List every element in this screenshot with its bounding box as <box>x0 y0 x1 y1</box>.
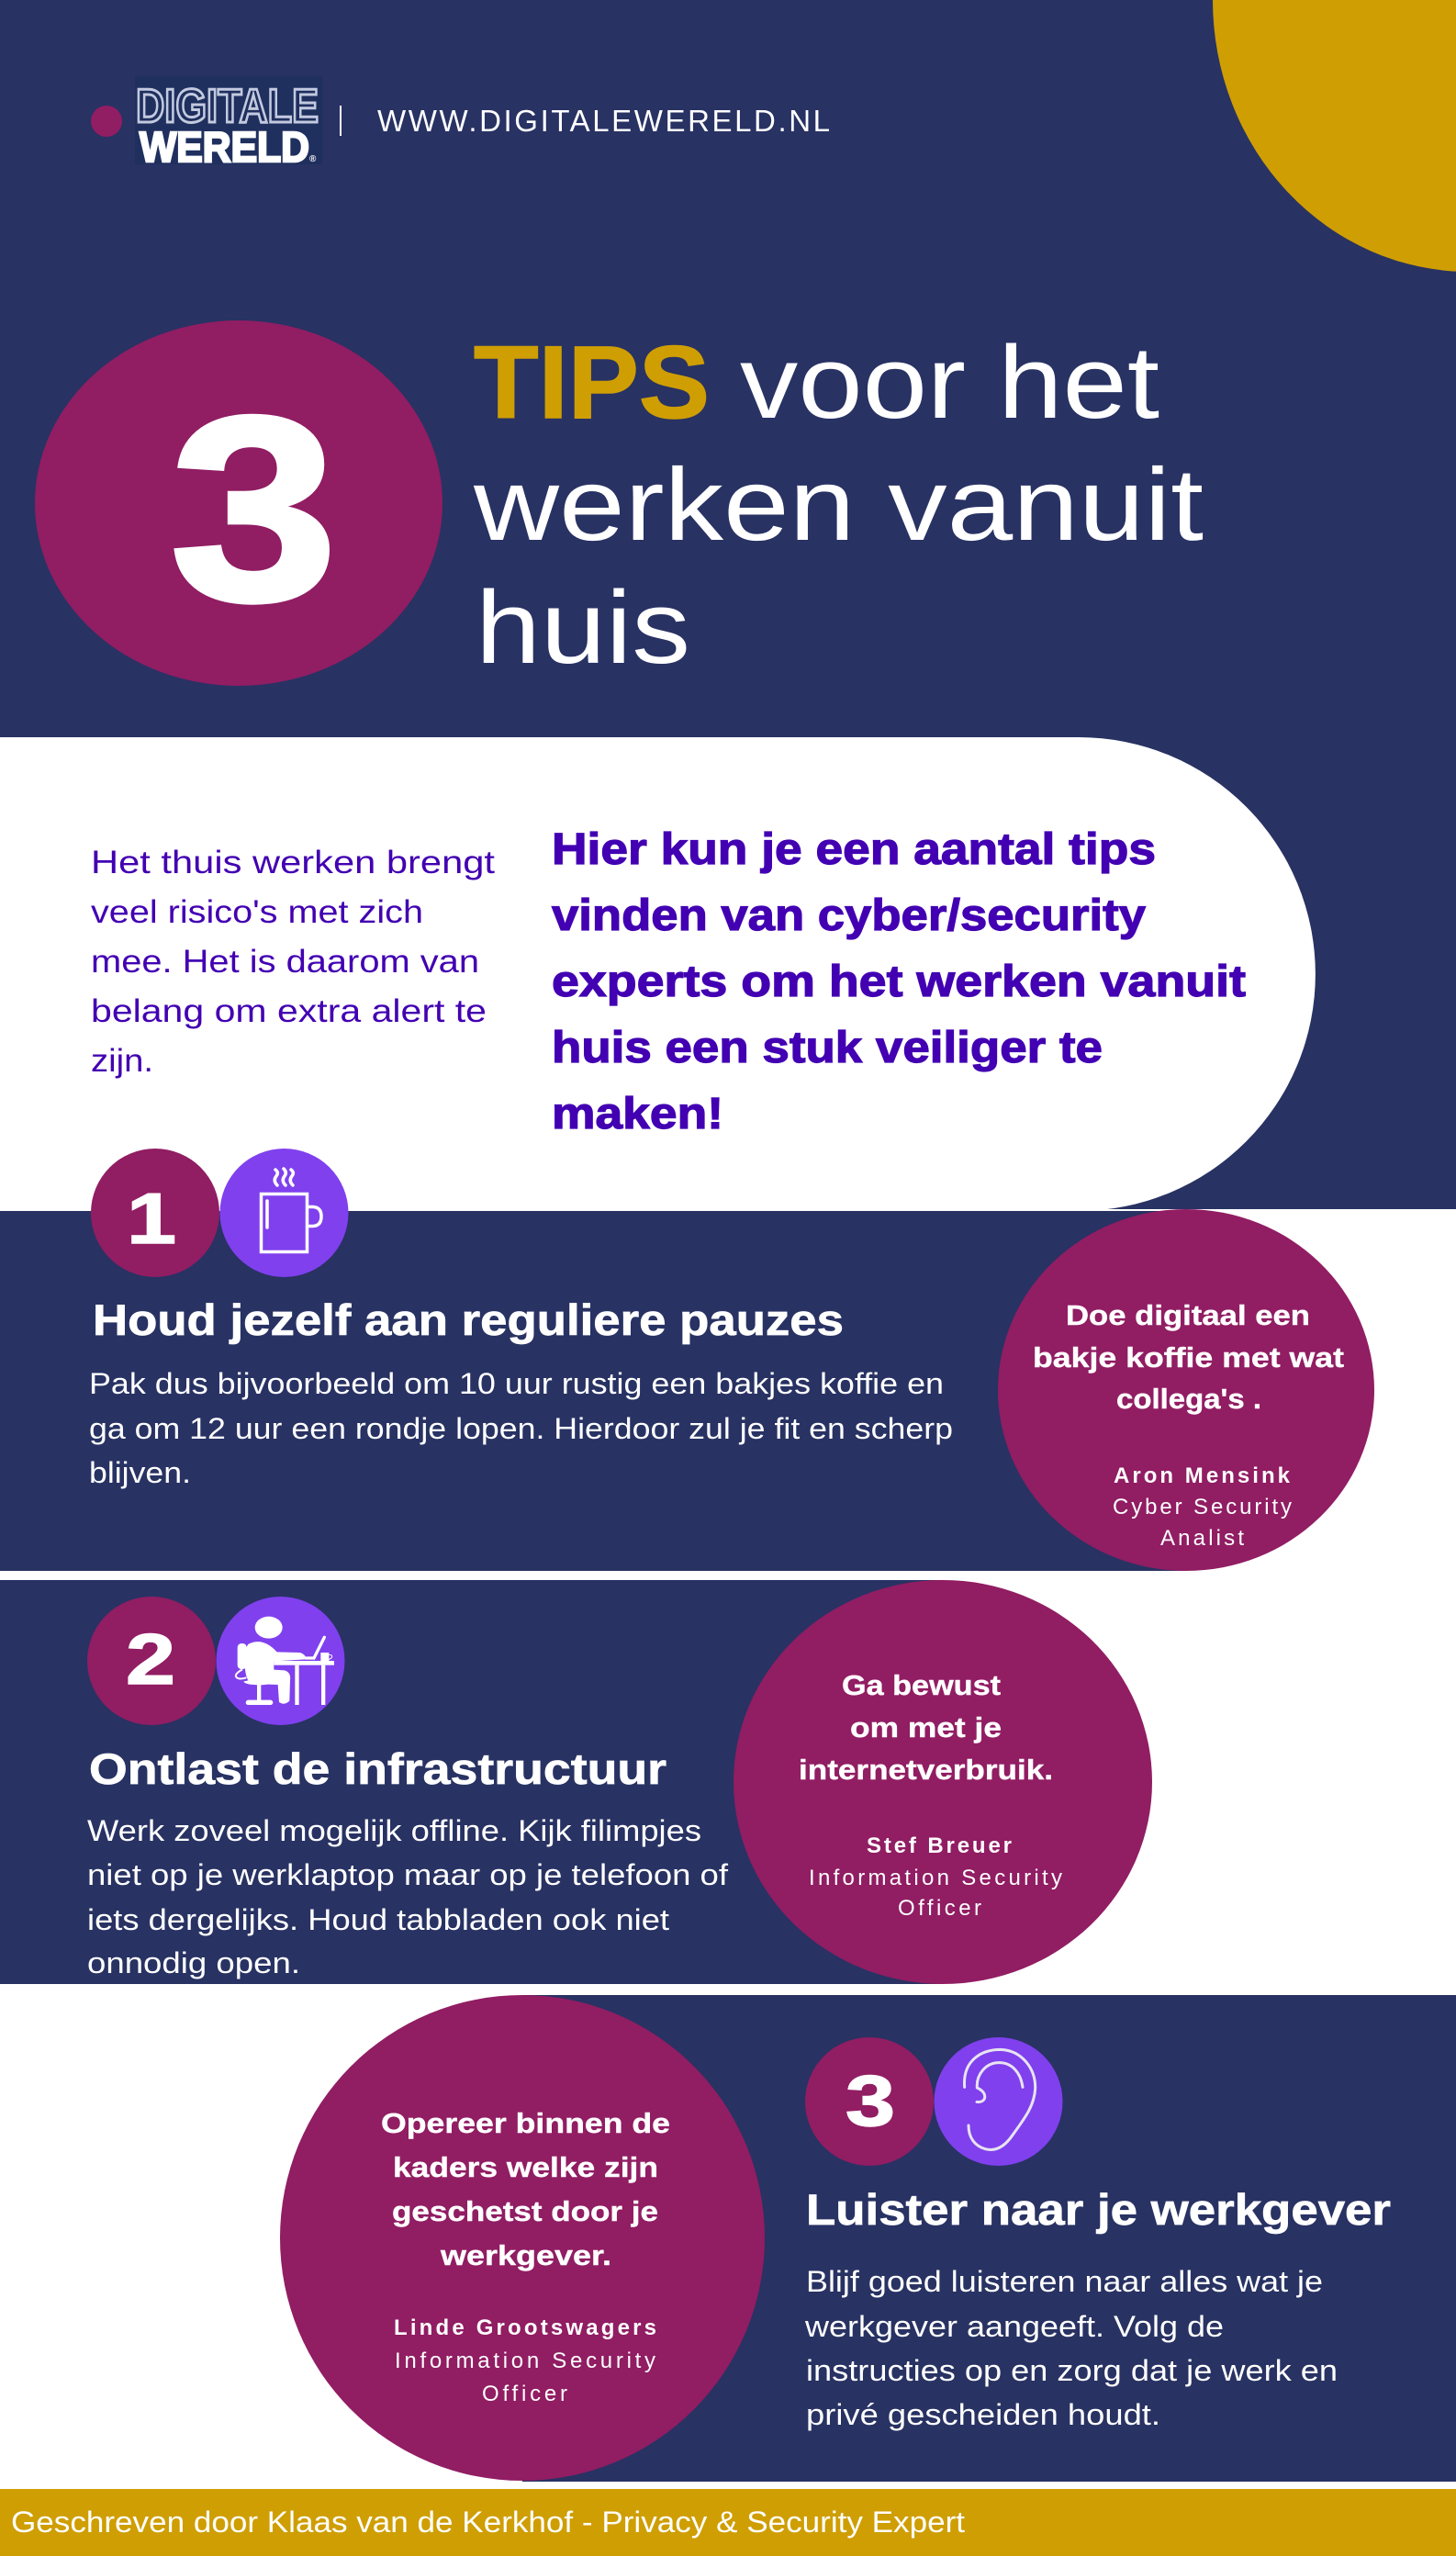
tip 3 number badge <box>805 2037 934 2166</box>
tip 2 number badge: 2 <box>126 1619 175 1699</box>
intro text right <box>552 825 1246 1138</box>
tip 1 quote circle: collega's . <box>1116 1383 1261 1415</box>
title: huis <box>476 570 690 685</box>
icon: person at desk <box>217 1597 345 1725</box>
logo and website <box>91 76 830 171</box>
tip 2 quote circle: Ga bewust <box>842 1669 1001 1701</box>
panel: tip 2 <box>0 1580 1152 1984</box>
logo: Digitale Wereld: ® <box>309 154 317 164</box>
tip 3 body: instructies op en zorg dat je werk en <box>806 2354 1338 2387</box>
tip 1 body: Pak dus bijvoorbeeld om 10 uur rustig een bakjes koffie en <box>89 1367 944 1400</box>
tip 3 quote circle: werkgever. <box>440 2239 611 2271</box>
icon: coffee mug <box>220 1149 349 1277</box>
panel: tip 3 <box>280 1995 1456 2482</box>
tip 1 heading: Houd jezelf aan reguliere pauzes <box>93 1295 844 1344</box>
tip 1 quote circle <box>998 1209 1374 1571</box>
tip 2 quote circle: Information Security <box>809 1866 1062 1890</box>
tip 1 quote circle: Doe digitaal een <box>1066 1299 1310 1331</box>
intro text right: experts om het werken vanuit <box>552 958 1246 1006</box>
tip 1 quote circle: Cyber Security <box>1113 1495 1292 1519</box>
big number circle <box>35 320 442 686</box>
tip 3 body: werkgever aangeeft. Volg de <box>804 2310 1224 2343</box>
logo: Digitale Wereld <box>135 76 322 171</box>
tip 1 number badge <box>91 1149 219 1277</box>
tip 2 quote circle: internetverbruik. <box>799 1754 1053 1786</box>
title <box>473 325 1204 685</box>
intro text right: huis een stuk veiliger te <box>552 1024 1103 1072</box>
tip 2 quote circle: Stef Breuer <box>867 1833 1012 1858</box>
intro text left: belang om extra alert te <box>91 993 487 1029</box>
intro text left: veel risico's met zich <box>91 894 423 930</box>
intro text right: vinden van cyber/security <box>552 891 1146 940</box>
decorative gold circle top right <box>1213 0 1456 272</box>
tip 2 quote circle <box>734 1580 1152 1984</box>
tip 2 quote circle: om met je <box>850 1711 1002 1743</box>
tip 1 quote circle: Analist <box>1160 1526 1244 1551</box>
logo: Digitale Wereld: WERELD <box>140 123 309 171</box>
intro text right: maken! <box>552 1090 723 1138</box>
tip 2 body: iets dergelijks. Houd tabbladen ook niet <box>87 1903 669 1936</box>
tip 1 body <box>89 1367 953 1489</box>
intro text left: mee. Het is daarom van <box>91 944 479 980</box>
intro text right: Hier kun je een aantal tips <box>552 825 1156 874</box>
tip 2 body: Werk zoveel mogelijk offline. Kijk filimpjes <box>87 1814 701 1847</box>
tip 1 body: blijven. <box>89 1456 191 1489</box>
tip 3 body <box>804 2265 1338 2431</box>
tip 3 quote circle: kaders welke zijn <box>393 2151 658 2183</box>
footer: Geschreven door Klaas van de Kerkhof - Privacy & Security Expert <box>11 2506 965 2539</box>
website url: WWW.DIGITALEWERELD.NL <box>377 104 830 138</box>
title: TIPS <box>474 325 710 440</box>
intro text left <box>91 845 495 1079</box>
big number circle: 3 <box>170 362 338 656</box>
tip 1 number badge: 1 <box>127 1178 176 1259</box>
icon: ear <box>935 2037 1063 2166</box>
tip 3 quote circle: Linde Grootswagers <box>394 2315 656 2340</box>
panel: intro white <box>0 737 1316 1211</box>
tip 2 number badge <box>87 1597 216 1725</box>
intro text left: Het thuis werken brengt <box>91 845 495 880</box>
panel: header background <box>0 0 1456 1209</box>
tip 2 body <box>87 1814 728 1979</box>
title: voor het <box>740 325 1159 440</box>
tip 3 body: privé gescheiden houdt. <box>806 2398 1160 2431</box>
separator <box>340 106 342 136</box>
tip 3 quote circle <box>280 1995 765 2481</box>
panel: tip 1 <box>0 1149 1374 1571</box>
tip 3 body: Blijf goed luisteren naar alles wat je <box>806 2265 1323 2298</box>
tip 2 heading: Ontlast de infrastructuur <box>89 1744 666 1793</box>
intro text left: zijn. <box>91 1043 153 1079</box>
tip 2 body: niet op je werklaptop maar op je telefoon of <box>87 1858 728 1891</box>
title: werken vanuit <box>473 447 1204 562</box>
tip 2 body: onnodig open. <box>87 1946 300 1979</box>
tip 1 quote circle: bakje koffie met wat <box>1033 1341 1344 1373</box>
tip 3 quote circle: Officer <box>482 2382 567 2406</box>
tip 2 quote circle: Officer <box>898 1896 981 1921</box>
logo dot <box>91 106 122 137</box>
tip 3 quote circle: Opereer binnen de <box>381 2107 670 2139</box>
logo: Digitale Wereld: DIGITALE <box>136 80 319 133</box>
footer <box>0 2489 1456 2556</box>
tip 1 body: ga om 12 uur een rondje lopen. Hierdoor zul je fit en scherp <box>89 1412 953 1445</box>
tip 3 heading: Luister naar je werkgever <box>806 2185 1391 2234</box>
tip 1 quote circle: Aron Mensink <box>1114 1463 1291 1488</box>
tip 3 number badge: 3 <box>846 2060 895 2141</box>
tip 3 quote circle: Information Security <box>395 2349 655 2373</box>
tip 3 quote circle: geschetst door je <box>392 2195 658 2227</box>
